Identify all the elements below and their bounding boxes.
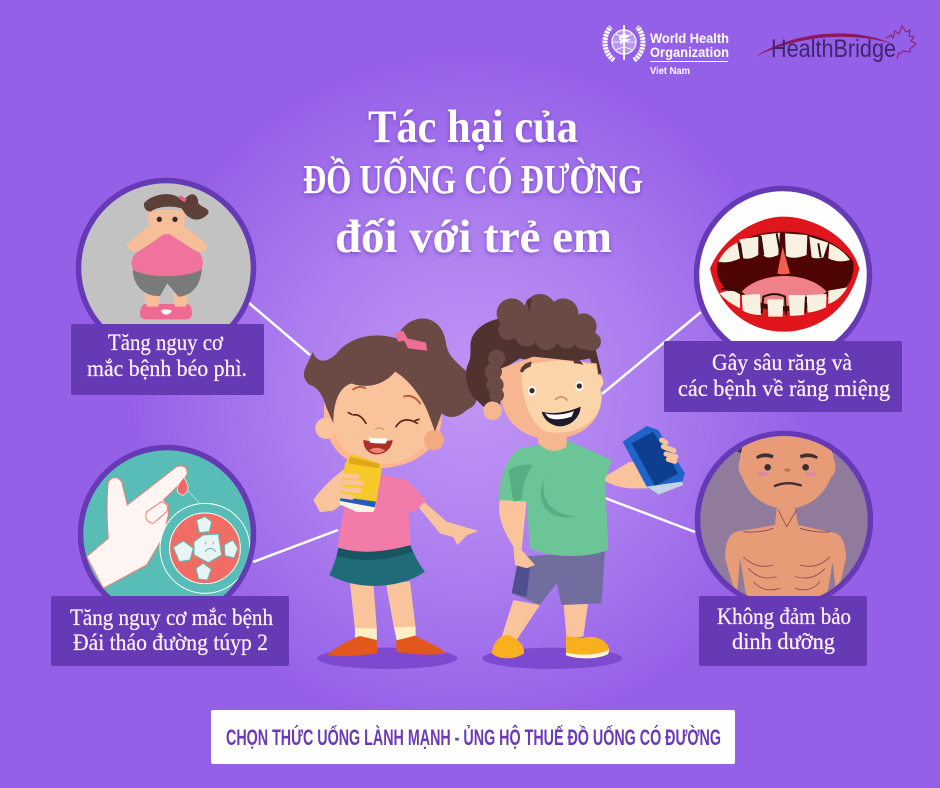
shoes: [492, 635, 524, 658]
left arm: [499, 500, 535, 568]
blue can: [623, 426, 685, 494]
skirt: [329, 544, 425, 586]
ears: [483, 401, 502, 420]
shirt: [337, 475, 426, 552]
call to action banner: [211, 710, 735, 764]
panel: obesity: [71, 180, 264, 395]
blood drop: [177, 477, 188, 495]
logo arc: [755, 33, 893, 57]
eyes: [157, 217, 162, 222]
panel: malnutrition: dinh dưỡng: [732, 629, 835, 654]
logo wordmark: HealthBridge: [771, 35, 896, 63]
right arm: [602, 462, 653, 488]
illustration: girl with yellow can: [304, 318, 478, 669]
icon: WHO emblem: [605, 25, 643, 60]
label text: Tăng nguy cơ: [108, 330, 224, 355]
back hair: [466, 318, 602, 407]
logo: World Health Organization Viet Nam: Organization: [650, 44, 729, 60]
title: Tác hại của: [368, 101, 578, 153]
curly hair: side curls: [488, 350, 505, 367]
title: đối với trẻ em: [335, 211, 612, 263]
ground shadow: [317, 648, 457, 669]
arms: [127, 223, 207, 252]
hand fingers on can: [337, 475, 361, 497]
title: [303, 101, 643, 263]
shorts: [512, 552, 605, 605]
panel: diabetes: Đái tháo đường túyp 2: [73, 630, 268, 655]
panel: diabetes: [51, 448, 289, 666]
hand: [87, 466, 187, 588]
title: ĐỒ UỐNG CÓ ĐƯỜNG: [303, 156, 643, 202]
face: [756, 453, 818, 459]
neck: [537, 433, 567, 451]
hair: [144, 194, 209, 220]
mouth: [363, 440, 393, 454]
eyes and brows: [348, 413, 419, 427]
body: [132, 233, 203, 276]
ground shadow: [482, 648, 622, 669]
head: [500, 357, 602, 439]
tongue: [742, 276, 827, 306]
label box: [51, 596, 289, 666]
right arm: [417, 503, 478, 545]
upper teeth: [718, 233, 850, 262]
smile: [542, 407, 581, 426]
panel: tooth decay: [664, 188, 902, 412]
torso: [725, 508, 846, 598]
WHO name: World Health: [650, 30, 729, 46]
cavities: [722, 233, 821, 315]
left arm: [313, 469, 350, 512]
scale: [140, 304, 192, 319]
sugar cubes: [173, 517, 238, 580]
shirt: [498, 440, 612, 556]
head: [148, 210, 185, 234]
label box: [664, 341, 902, 412]
connector lines: [249, 303, 701, 562]
yellow can: [339, 454, 382, 512]
label text: Gây sâu răng và: [712, 350, 852, 375]
circle: decayed mouth: [696, 188, 870, 362]
label box: [71, 324, 264, 395]
head: [740, 435, 834, 509]
lips: [710, 217, 859, 332]
shoes: [327, 636, 377, 656]
magnifier: [160, 503, 250, 593]
bow: [394, 331, 427, 351]
circle: malnourished child: [698, 434, 870, 606]
label text: Tăng nguy cơ mắc bệnh: [70, 605, 273, 630]
icon: maple leaf outline: [886, 26, 916, 59]
socks: [355, 627, 416, 640]
eyes and brows: [520, 359, 583, 373]
head: [324, 353, 442, 468]
curly hair: top: [485, 294, 601, 402]
panel: obesity: mắc bệnh béo phì.: [87, 356, 247, 381]
logo: HealthBridge: [755, 26, 916, 63]
label box: [699, 596, 867, 666]
hair: [304, 318, 477, 432]
logo: World Health Organization Viet Nam: [605, 25, 729, 77]
legs: [144, 293, 188, 307]
lower teeth: [719, 287, 847, 317]
hair: [736, 444, 834, 453]
hand fingers: [662, 440, 676, 461]
ribs: [743, 510, 830, 590]
circle: finger blood test with sugar cubes: [80, 448, 254, 620]
panel: tooth decay: các bệnh về răng miệng: [678, 376, 890, 401]
illustration: boy with blue can: [466, 294, 685, 669]
mouth interior: [717, 232, 854, 311]
ears: [315, 418, 337, 439]
WHO country: Viet Nam: [650, 66, 690, 77]
legs: [502, 600, 588, 640]
banner box: [211, 710, 735, 764]
panel: malnutrition: [698, 434, 870, 666]
legs: [350, 582, 416, 630]
label text: Không đảm bảo: [717, 604, 851, 629]
circle: obese girl on scale: [78, 180, 254, 356]
sad face on cube: [205, 542, 216, 552]
